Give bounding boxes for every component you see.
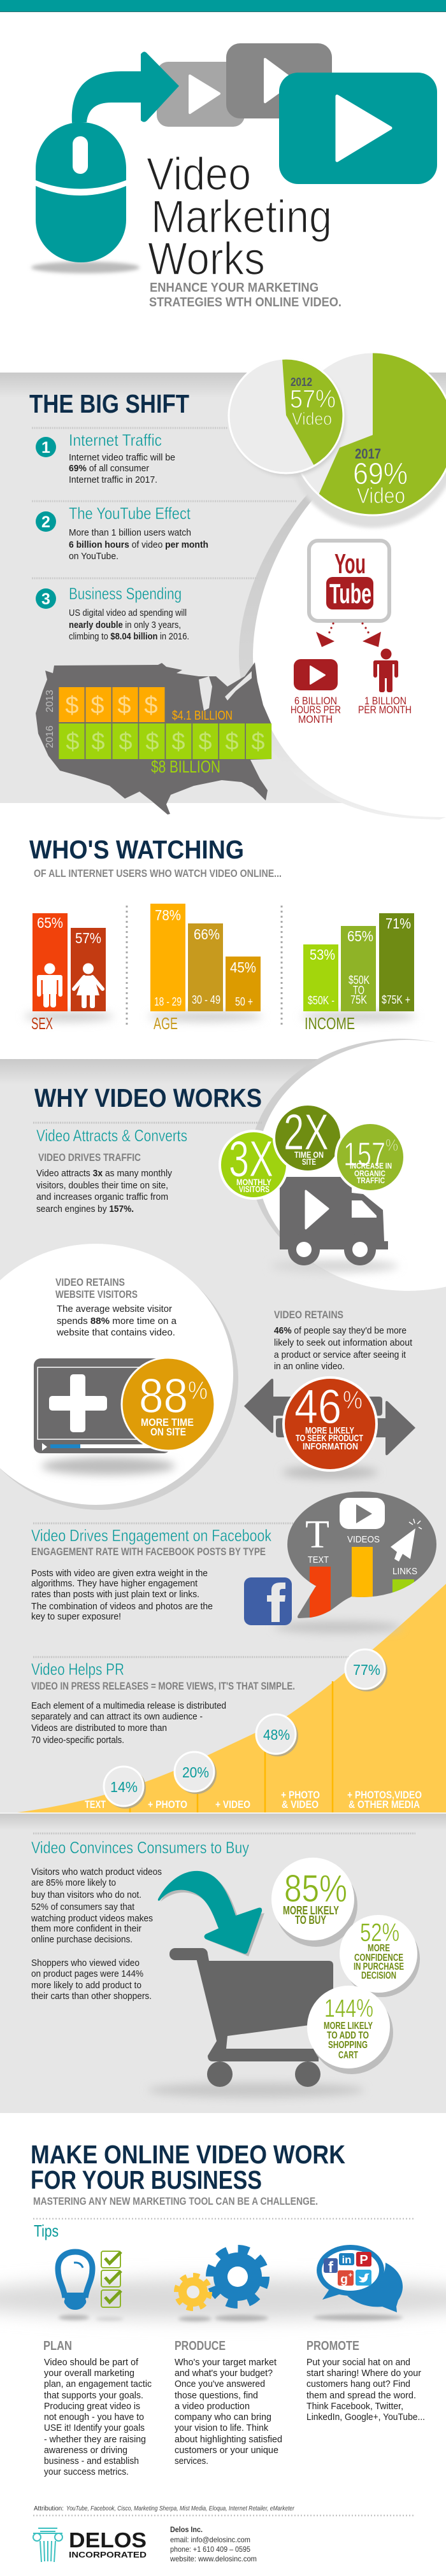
stat: 88% more time on site: 88 [139,1369,188,1423]
stat: 2x time on site: TIME ON [294,1149,324,1160]
icon: woman [74,963,103,1008]
stat: 52% more confidence: 52% [360,1919,399,1947]
title [147,149,332,285]
labels: media types: + PHOTO [281,1789,320,1801]
point 1: internet traffic: 1 [41,439,50,457]
point 3: business spending: climbing to $8.04 billion in 2016. [69,631,189,642]
icon: facebook [244,1577,292,1625]
text: video attracts and converts [36,1126,187,1214]
icon: videos [340,1498,385,1545]
text: promote: LinkedIn, Google+, YouTube... [306,2412,425,2423]
text: video retains [274,1309,413,1372]
heading: why video works: WHY VIDEO WORKS [34,1083,262,1113]
heading: tips: Tips [34,2221,59,2240]
contact details: email: info@delosinc.com [170,2535,250,2544]
icon: pinterest small: P [359,2253,368,2267]
panel: the big shift background [0,360,446,820]
icon: gears [176,2249,265,2309]
labels: media types: & OTHER MEDIA [349,1798,420,1811]
icon: youtube logo: You [334,548,366,580]
bar: 2016 spending: $ [198,729,212,755]
hero graphic [31,43,437,273]
text: video helps pr [31,1660,295,1746]
chart: age: 78% [155,907,181,923]
bar: 2013 spending: $ [117,692,131,719]
chart: 2017 pie: Video [357,484,405,508]
chart: facebook post bubble [274,1491,436,1633]
labels: media types [85,1789,422,1811]
icon: youtube logo: Tube [329,578,371,609]
text: video retains: in an online video. [274,1361,345,1372]
text: video convinces consumers to buy: buy than visitors who do not. [31,1889,141,1900]
icon: text: TEXT [308,1555,329,1565]
icon: light grey video tile [157,62,245,127]
text: produce: and what's your budget? [175,2368,273,2379]
text: promote: start sharing! Where do your [306,2368,421,2379]
chart: 2017 pie: 69% [353,457,408,491]
text: video helps pr: separately and can attract its own audience - [31,1711,203,1722]
stat: 52% more confidence: DECISION [361,1970,396,1981]
labels: media types: TEXT [85,1798,106,1811]
contact details: website: www.delosinc.com [169,2554,257,2563]
icon: youtube logo [309,541,389,621]
arrows: dotted red [316,622,381,647]
icon: text: T [305,1513,329,1556]
point 2: the youtube effect: The YouTube Effect [69,504,191,523]
text: plan: business - and establish [44,2456,139,2466]
chart: 2012 pie: 57% [290,385,336,413]
text: plan: - whether they are raising [44,2434,146,2445]
bar shadows [24,1011,416,1021]
text: video retains website visitors: WEBSITE VISITORS [55,1289,138,1300]
text: video helps pr: Each element of a multimedia release is distributed [31,1700,226,1711]
icon: google plus small: + [349,2272,352,2279]
text: video retains website visitors [55,1277,177,1338]
map of the USA [36,662,271,815]
icon: red play button [294,659,338,690]
text: video drives engagement on facebook: algorithms. They have higher engagement [31,1578,198,1589]
text: video convinces consumers to buy: are 85% more likely to [31,1877,116,1888]
stat: 48% photo and video: 48% [263,1726,290,1743]
yellow growth area [17,1584,446,1812]
chart: income: INCOME [305,1014,355,1033]
text: video helps pr: VIDEO IN PRESS RELEASES = MORE VIEWS, IT'S THAT SIMPLE. [31,1681,295,1692]
text: produce: customers or your unique [175,2445,278,2456]
stat: 46% more likely: % [343,1386,363,1414]
text: video drives engagement on facebook: key to super exposure! [31,1611,121,1622]
label: 1 billion per month [358,695,412,716]
point 3: business spending [36,584,189,642]
chart: income: $50K [349,974,370,986]
text: video convinces consumers to buy: their carts than other shoppers. [31,1991,152,2002]
heading: make online video work: MAKE ONLINE VIDEO WORK [31,2140,345,2169]
stat: 144% add to cart: TO ADD TO [327,2030,369,2041]
subtitle [149,281,342,310]
stat: 144% add to cart [307,1986,393,2074]
text: video helps pr: 70 video-specific portals. [31,1735,124,1746]
stat: 88% more time on site: % [188,1377,208,1405]
arrow: teal into cart [158,1871,264,1956]
chart: age: 30 - 49 [192,993,220,1006]
text: video convinces consumers to buy: Visitors who watch product videos [31,1867,162,1877]
bar: 2016 spending: 2016 [45,725,55,748]
chart: income [303,913,414,1033]
stat: 157% organic traffic [336,1123,405,1192]
text: promote: PROMOTE [306,2339,359,2353]
text: produce: about highlighting satisfied [175,2434,282,2445]
logo: delos: INCORPORATED [69,2550,147,2559]
stat: 85% more likely to buy: 85% [284,1867,347,1910]
point 2: the youtube effect: 6 billion hours of video per month [69,539,208,550]
text: plan [43,2339,152,2477]
stat: 20% photo: 20% [182,1764,209,1781]
stat: 46% more likely: 46 [294,1380,342,1434]
stat: 157% organic traffic: 157 [343,1136,385,1173]
text: video drives engagement on facebook: Posts with video are given extra weight in the [31,1568,208,1579]
text: plan: Producing great video is [44,2401,140,2412]
label: 6 billion hours: 6 BILLION [294,695,337,707]
text: produce: PRODUCE [175,2339,226,2353]
text: produce: a video production [175,2401,250,2412]
heading: make online video work: FOR YOUR BUSINESS [31,2165,262,2195]
text: plan: plan, an engagement tactic [44,2379,152,2389]
icon: dark grey video tile [226,43,332,118]
contact details [169,2525,257,2563]
icon: shopping cart [148,1948,364,2098]
text: video drives engagement on facebook: The combination of videos and photos are the [31,1601,213,1612]
stat: 157% organic traffic: TRAFFIC [357,1176,385,1185]
point 2: the youtube effect: More than 1 billion users watch [69,527,191,538]
point 2: the youtube effect [36,504,208,562]
stat: 14% text [104,1767,146,1809]
point 3: business spending: 3 [41,590,50,608]
point 2: the youtube effect: on YouTube. [69,551,119,562]
text: video helps pr: Videos are distributed to more than [31,1723,167,1733]
stat: 52% more confidence: MORE [368,1943,390,1954]
heading: who's watching: WHO'S WATCHING [29,835,244,864]
chart: income: 71% [385,915,411,932]
subheading: who's watching: OF ALL INTERNET USERS WHO WATCH VIDEO ONLINE... [34,867,282,879]
stat: 3x monthly visitors [220,1130,287,1199]
label: 6 billion hours: MONTH [298,713,333,725]
heading: make online video work [31,2140,345,2195]
stat: 46% more likely: INFORMATION [303,1441,358,1452]
bar: 2013 spending: $ [65,692,79,719]
text: produce: services. [175,2456,208,2466]
bar: 2016 spending: $8 BILLION [151,757,220,776]
text: produce: Who's your target market [175,2357,277,2368]
text: video convinces consumers to buy: watching product videos makes [31,1913,153,1924]
stat: 14% text: 14% [110,1779,138,1795]
icon: mouse shadow [31,262,140,273]
stat: 157% organic traffic: INCREASE IN [350,1161,392,1171]
bar: 2016 spending: $ [145,729,159,755]
stat: 2x time on site: SITE [302,1156,316,1167]
text: video retains website visitors: website that contains video. [56,1327,175,1338]
bar: 2016 spending [45,723,271,776]
point 2: the youtube effect: 2 [41,513,50,531]
logo: delos [33,2528,147,2562]
bar: 2016 spending: $ [91,729,105,755]
text: video retains website visitors: VIDEO RETAINS [55,1277,125,1288]
labels: media types: + PHOTOS,VIDEO [347,1789,422,1801]
text: video convinces consumers to buy: on product pages were 144% [31,1968,143,1979]
icon: linkedin small: in [342,2254,352,2266]
panel: why video works background [0,1059,446,1814]
point 3: business spending: US digital video ad spending will [69,608,187,618]
stat: 46% more likely [284,1377,377,1470]
heading: the big shift: THE BIG SHIFT [29,389,189,418]
contact details: phone: +1 610 409 – 0595 [170,2545,250,2554]
title: Marketing [151,192,332,243]
labels: media types: & VIDEO [282,1798,319,1811]
chart: income: 65% [347,928,373,944]
stat: 3x monthly visitors: MONTHLY [236,1177,272,1187]
text: video attracts and converts: Video Attracts & Converts [36,1126,187,1145]
stat: 20% photo [175,1752,217,1794]
stat: 144% add to cart: MORE LIKELY [324,2021,373,2032]
bar: 2016 spending: $ [66,729,80,755]
chart: income: TO [353,984,364,997]
text: video convinces consumers to buy: online purchase decisions. [31,1934,133,1945]
icon: google plus small [338,2270,354,2286]
bar: 2016 spending: $ [225,729,239,755]
stat: 48% photo and video [256,1714,298,1756]
icon: facebook small: f [328,2259,334,2276]
point 1: internet traffic [36,431,175,485]
text: promote [306,2339,425,2423]
label: 6 billion hours [291,695,341,725]
point 1: internet traffic: Internet video traffic will be [69,452,175,463]
attribution: Attribution: [34,2505,64,2512]
chart: income: $75K + [382,993,410,1006]
stat: 85% more likely to buy [271,1858,357,1947]
icon: videos: VIDEOS [347,1534,380,1545]
text: produce: those questions, find [175,2390,258,2401]
text: video attracts and converts: search engines by 157%. [36,1204,134,1214]
stat: 3x monthly visitors: 3X [229,1130,273,1187]
icon: twitter small [356,2270,371,2286]
text: video convinces consumers to buy: more likely to add product to [31,1980,141,1991]
bar: 2016 spending: $ [119,729,133,755]
chart: age: 66% [194,926,220,943]
text: plan: USE it! Identify your goals [44,2423,145,2433]
point 3: business spending: Business Spending [69,584,182,603]
text: plan: not enough - you have to [44,2412,144,2423]
label: 6 billion hours: HOURS PER [291,704,341,716]
text: video attracts and converts: Video attracts 3x as many monthly [36,1168,172,1179]
point 1: internet traffic: 69% of all consumer [69,463,149,474]
attribution: YouTube, Facebook, Cisco, Marketing Sherpa, Mist Media, Eloqua, Internet Retailer, eMarketer [66,2505,295,2512]
band shadow behind tips icons [0,2279,446,2319]
text: video drives engagement on facebook: rates than posts with just plain text or links. [31,1589,199,1600]
title: Video [147,149,251,200]
chart: 2017 pie: 2017 [355,446,381,462]
text: promote: them and spread the word. [306,2390,416,2401]
text: produce: Once you've answered [175,2379,265,2389]
stat: 88% more time on site: ON SITE [150,1426,186,1438]
chart: age [150,904,261,1033]
chart: sex [31,913,106,1033]
text: video drives engagement on facebook [31,1526,272,1622]
chart: age: 50 + [235,995,253,1008]
top bar [0,0,446,12]
text: video attracts and converts: visitors, doubles their time on site, [36,1180,168,1191]
chart: age: AGE [154,1014,178,1033]
subheading: mastering: MASTERING ANY NEW MARKETING TOOL CAN BE A CHALLENGE. [33,2195,318,2207]
text: produce: your vision to life. Think [175,2423,268,2433]
bar: 2016 spending: $ [251,729,265,755]
text: promote: customers hang out? Find [306,2379,410,2389]
icon: two-way arrows [244,1379,415,1479]
text: video retains: likely to seek out information about [274,1337,413,1348]
stat: 52% more confidence: IN PURCHASE [354,1961,404,1972]
stat: 2x time on site [274,1104,342,1172]
text: promote: Think Facebook, Twitter, [306,2401,403,2412]
chart: sex: 57% [75,930,101,946]
text: video convinces consumers to buy: Video Convinces Consumers to Buy [31,1838,249,1857]
point 1: internet traffic: Internet Traffic [69,431,162,450]
text: plan: your success metrics. [44,2466,129,2477]
stat: 144% add to cart: SHOPPING [328,2040,368,2051]
chart: 2012 pie [229,359,345,476]
chart: age: 18 - 29 [154,995,182,1008]
chart: age: 45% [230,959,256,976]
stat: 144% add to cart: CART [338,2050,358,2061]
chart: 2012 pie: 2012 [291,376,312,388]
icon: mouse and arrow [36,52,179,262]
point 1: internet traffic: Internet traffic in 2017. [69,474,157,485]
chart: sex: 65% [37,914,63,931]
stat: 77% all media: 77% [353,1662,380,1678]
text: video convinces consumers to buy [31,1838,249,2002]
bar: 2013 spending [45,687,233,723]
text: video convinces consumers to buy: 52% of consumers say that [31,1902,135,1912]
panel: video convinces consumers background [0,1812,446,2113]
icon: social speech bubbles [317,2245,403,2312]
stat: 88% more time on site [122,1358,215,1451]
icon: links: LINKS [392,1566,417,1577]
icon: google plus small: g [340,2273,348,2286]
text: plan: awareness or driving [44,2445,127,2456]
stat: 3x monthly visitors: VISITORS [239,1184,270,1194]
text: video drives engagement on facebook: Video Drives Engagement on Facebook [31,1526,272,1545]
bar: 2013 spending: $4.1 BILLION [172,709,233,723]
icon: teal video tile [279,73,437,184]
text: plan: that supports your goals. [44,2390,143,2401]
text: plan: Video should be part of [44,2357,139,2368]
chart: income: 53% [310,946,335,963]
text: promote: Put your social hat on and [306,2357,410,2368]
text: video retains website visitors: spends 88% more time on a [57,1316,177,1327]
stat: 157% organic traffic: ORGANIC [354,1169,385,1178]
stat: 2x time on site: 2X [284,1104,329,1160]
chart: income: 75K [350,993,367,1006]
text: video retains: a product or service after seeing it [274,1349,406,1360]
chart: 2012 pie: Video [292,409,332,429]
label: 1 billion per month: 1 BILLION [364,695,406,707]
text: produce: company who can bring [175,2412,271,2423]
bar: 2016 spending: $ [171,729,185,755]
icon: truck [271,1177,398,1272]
chart: income: $50K - [308,994,334,1007]
labels: media types: + PHOTO [148,1798,187,1811]
text: plan: PLAN [43,2339,72,2353]
panel: white blob for truck [250,1039,446,1291]
bar: 2013 spending: $ [90,692,104,719]
icon: man [37,963,62,1007]
stat: 85% more likely to buy: TO BUY [295,1914,326,1926]
text: plan: your overall marketing [44,2368,134,2379]
labels: media types: + VIDEO [215,1798,250,1811]
stat: 157% organic traffic: % [385,1135,398,1155]
bar: 2013 spending: $ [144,692,158,719]
chart: sex: SEX [31,1014,53,1033]
text: video retains: VIDEO RETAINS [274,1309,343,1321]
text: video convinces consumers to buy: them more confident in their [31,1923,141,1934]
point 3: business spending: nearly double in only 3 years, [69,620,181,630]
subtitle: STRATEGIES WTH ONLINE VIDEO. [149,295,342,310]
stat: 52% more confidence [340,1915,420,1997]
chart: 2017 pie [291,352,446,515]
text: video retains website visitors: The average website visitor [57,1304,172,1314]
icon: red person [373,648,398,692]
stat: 52% more confidence: CONFIDENCE [354,1953,403,1963]
stat: 46% more likely: TO SEEK PRODUCT [296,1433,363,1444]
contact details: Delos Inc. [170,2525,203,2534]
stat: 85% more likely to buy: MORE LIKELY [283,1904,339,1917]
logo: delos: DELOS [69,2528,147,2552]
bar: 2013 spending: 2013 [45,690,55,713]
icon: light bulb with checklist [58,2251,121,2310]
text: video attracts and converts: and increases organic traffic from [36,1192,168,1202]
text: produce [175,2339,282,2466]
text: video attracts and converts: VIDEO DRIVES TRAFFIC [38,1152,141,1163]
icon: links [391,1519,422,1577]
stat: 144% add to cart: 144% [324,1995,373,2023]
panel: white blob for website visitors [0,1244,238,1510]
title: Works [148,234,265,285]
text: video retains: 46% of people say they'd be more [274,1325,406,1336]
stat: 46% more likely: MORE LIKELY [305,1425,354,1436]
text: video drives engagement on facebook: ENGAGEMENT RATE WITH FACEBOOK POSTS BY TYPE [31,1546,266,1558]
label: 1 billion per month: PER MONTH [358,704,412,716]
text: video convinces consumers to buy: Shoppers who viewed video [31,1958,140,1968]
stat: 77% all media [345,1649,387,1691]
icon: column [33,2528,62,2562]
subtitle: ENHANCE YOUR MARKETING [150,281,319,295]
stat: 88% more time on site: MORE TIME [141,1416,194,1428]
icon: video player [34,1358,175,1475]
icon shadows [59,2314,403,2321]
text: video helps pr: Video Helps PR [31,1660,124,1679]
